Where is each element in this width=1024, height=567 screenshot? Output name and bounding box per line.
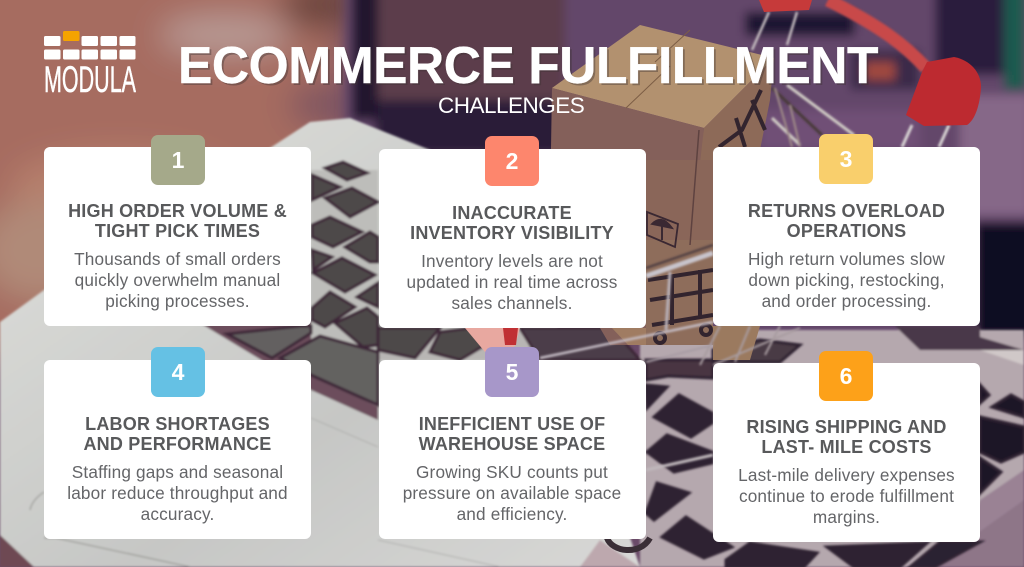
heading 4: [83, 414, 272, 454]
heading 1: [68, 201, 287, 241]
text 6: continue to erode fulfillment: [739, 486, 954, 506]
text 2: Inventory levels are not: [421, 250, 603, 270]
icon: fragile umbrella mark on box: [647, 212, 678, 247]
blurred brown backdrop and laptop screen: [0, 0, 360, 360]
badge 4: [151, 347, 205, 397]
subtitle: CHALLENGES: [438, 93, 584, 118]
panel: challenge 6: [713, 363, 980, 542]
text 1: Thousands of small orders: [74, 248, 281, 268]
heading 5: WAREHOUSE SPACE: [419, 434, 605, 454]
heading 1: TIGHT PICK TIMES: [95, 221, 260, 241]
heading 2: INVENTORY VISIBILITY: [410, 223, 614, 243]
keyboard keys: [227, 162, 640, 405]
heading 4: AND PERFORMANCE: [83, 434, 272, 454]
text 4: accuracy.: [141, 504, 214, 524]
heading 3: OPERATIONS: [787, 221, 906, 241]
heading 1: HIGH ORDER VOLUME &: [68, 201, 287, 221]
text 5: [403, 462, 621, 524]
text 2: [407, 250, 617, 312]
panel: challenge 4: [44, 360, 311, 538]
heading 5: INEFFICIENT USE OF: [419, 414, 605, 434]
badge 3: [819, 134, 873, 184]
text 4: [67, 462, 288, 524]
text 6: margins.: [813, 506, 880, 526]
heading 6: [746, 417, 947, 457]
heading 3: [748, 201, 945, 241]
panel: challenge 5: [378, 360, 646, 538]
heading 4: LABOR SHORTAGES: [85, 414, 270, 434]
badge 5: 5: [506, 359, 518, 385]
printed cart mark on box: [648, 90, 765, 343]
text 6: Last-mile delivery expenses: [738, 464, 955, 484]
text 2: updated in real time across: [407, 272, 617, 292]
heading 2: [410, 203, 614, 243]
red product under cart: [465, 328, 520, 358]
badge 2: 2: [506, 148, 518, 174]
text 3: High return volumes slow: [748, 248, 945, 268]
text 6: [738, 464, 955, 526]
text 1: picking processes.: [105, 290, 250, 310]
text 5: Growing SKU counts put: [416, 462, 608, 482]
badge 2: [485, 136, 539, 186]
text 2: sales channels.: [451, 292, 573, 312]
badge 6: [819, 350, 873, 400]
text 5: pressure on available space: [403, 482, 621, 502]
text 3: down picking, restocking,: [748, 270, 945, 290]
text 4: labor reduce throughput and: [67, 482, 288, 502]
heading 6: RISING SHIPPING AND: [746, 417, 947, 437]
text 1: [74, 248, 281, 310]
panel: challenge 2: [378, 149, 646, 328]
badge 1: 1: [172, 147, 184, 173]
panel: challenge 3: [713, 147, 980, 326]
heading 5: [418, 414, 605, 454]
heading 2: INACCURATE: [452, 203, 572, 223]
text 4: Staffing gaps and seasonal: [72, 462, 283, 482]
text 3: [748, 248, 945, 310]
logo: Modula: [44, 31, 136, 93]
cardboard box: [548, 25, 774, 360]
panel: challenge 1: [44, 147, 311, 326]
heading 6: LAST- MILE COSTS: [761, 437, 932, 457]
heading 3: RETURNS OVERLOAD: [748, 201, 945, 221]
cart wheel: [607, 538, 650, 550]
badge 3: 3: [840, 146, 852, 172]
badge 6: 6: [840, 362, 852, 388]
shopping cart wire and handle: [540, 0, 949, 470]
badge 1: [151, 135, 205, 185]
text 5: and efficiency.: [457, 504, 567, 524]
title: ECOMMERCE FULFILLMENT: [178, 36, 878, 94]
laptop deck: [0, 118, 1024, 567]
badge 4: 4: [172, 359, 184, 385]
badge 5: [485, 347, 539, 397]
text 1: quickly overwhelm manual: [75, 270, 280, 290]
text 3: and order processing.: [762, 290, 931, 310]
